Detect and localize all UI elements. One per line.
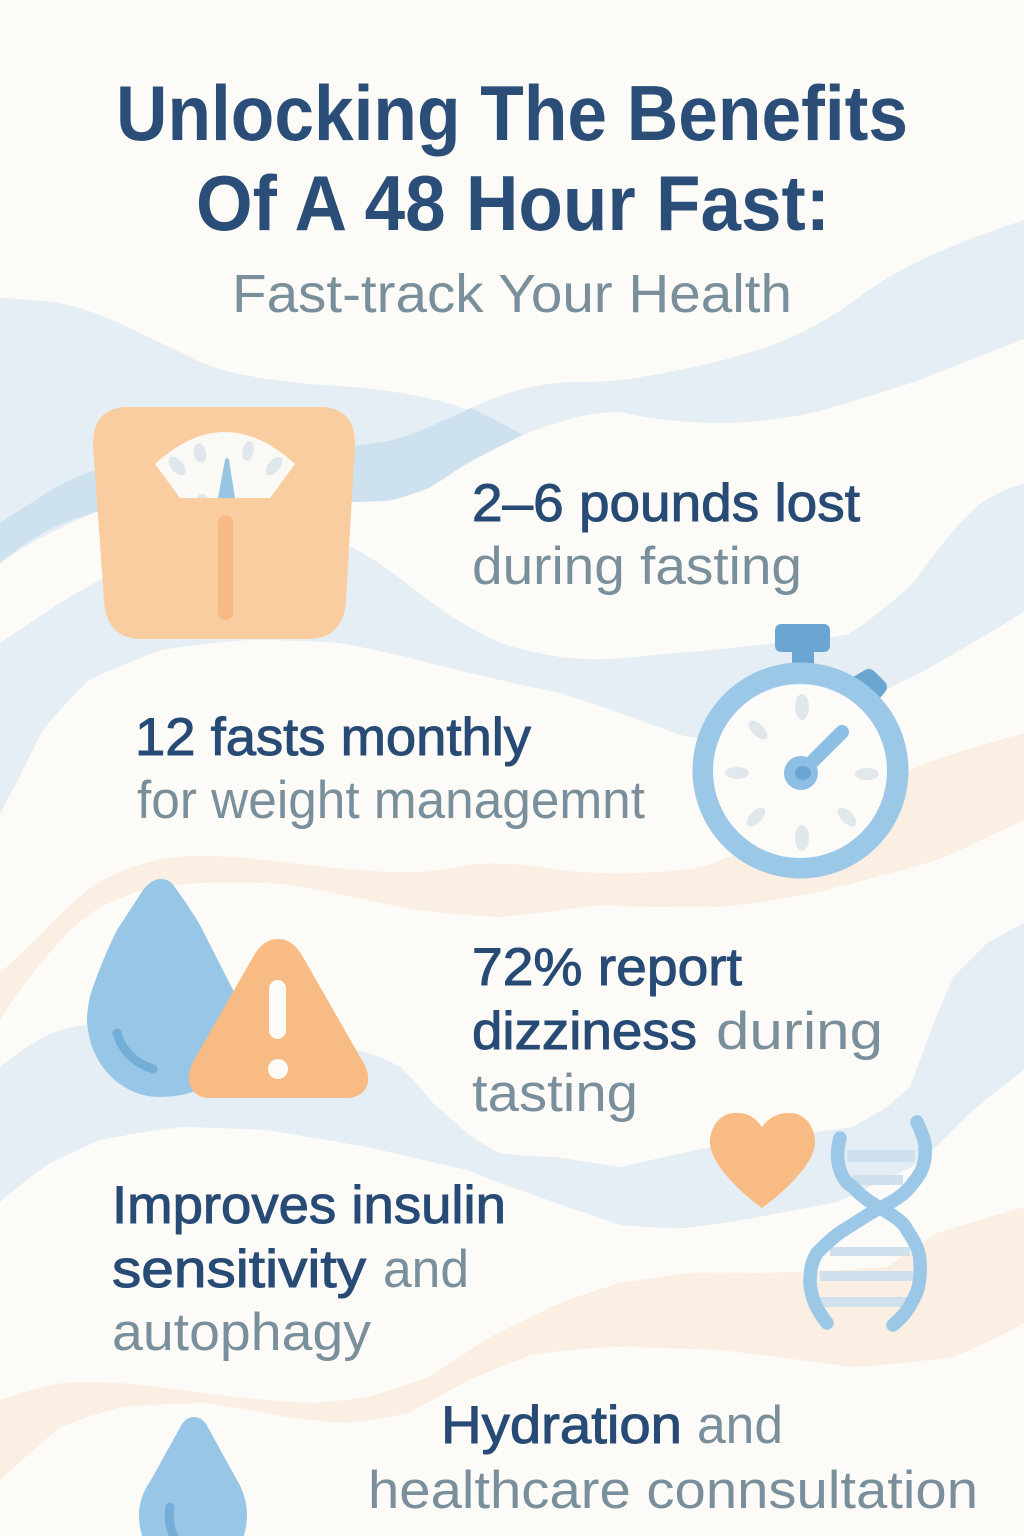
stat: fasts monthly [135,708,645,830]
stat: pounds lost [472,474,860,596]
stat: dizziness: tasting [472,1064,638,1123]
stat: fasts monthly: 12 fasts monthly [135,708,532,767]
benefit: insulin and autophagy: sensitivity [112,1240,367,1299]
benefit: hydration and consultation: healthcare connsultation [368,1461,978,1520]
benefit: insulin and autophagy [112,1176,506,1362]
benefit: hydration and consultation: Hydration [441,1396,682,1455]
stat: pounds lost: during fasting [472,537,802,596]
stat: dizziness: during [716,1002,883,1061]
stat: fasts monthly: for weight managemnt [137,771,645,830]
title: Unlocking The Benefits [116,69,908,157]
icon: weighing scale [93,407,355,639]
icon: heart [710,1113,815,1208]
icon: DNA helix [810,1122,925,1325]
benefit: insulin and autophagy: and [383,1240,469,1299]
stat: dizziness: 72% report [472,938,742,997]
stat: dizziness [472,938,883,1123]
icon: bottom water drop [139,1417,247,1536]
benefit: hydration and consultation: and [697,1396,783,1455]
stat: pounds lost: 2–6 pounds lost [472,474,860,533]
title [116,69,908,247]
title: Of A 48 Hour Fast: [196,159,830,247]
stat: dizziness: dizziness [472,1002,697,1061]
subtitle: Fast-track Your Health [232,264,792,324]
benefit: insulin and autophagy: Improves insulin [112,1176,506,1235]
icon: water drop with warning triangle [87,879,368,1098]
icon: stopwatch [692,624,908,878]
benefit: insulin and autophagy: autophagy [112,1303,372,1362]
benefit: hydration and consultation [368,1396,978,1520]
